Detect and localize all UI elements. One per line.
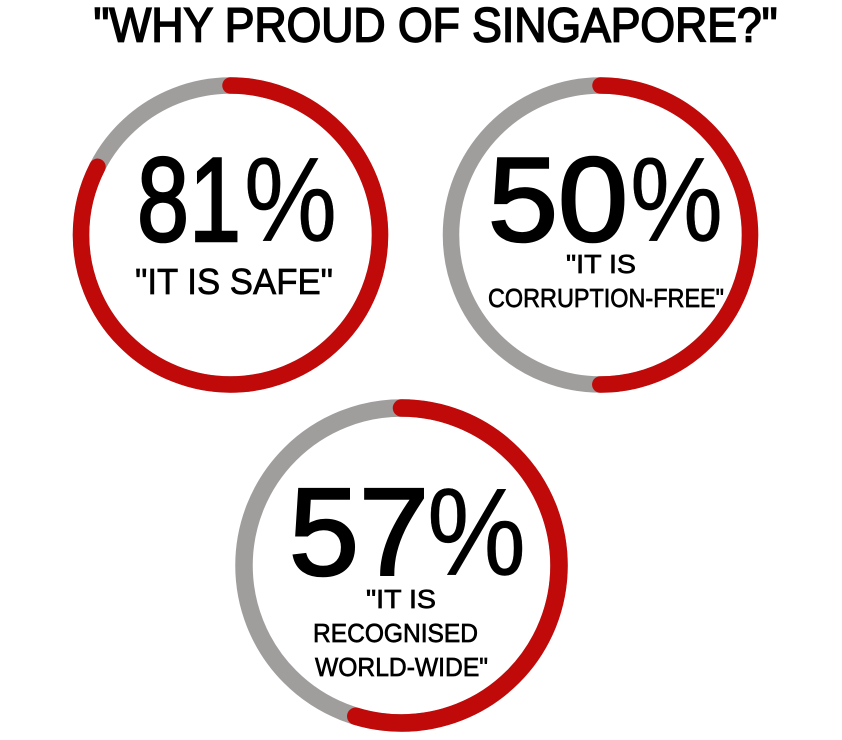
value: 57%: 57 [289,464,429,602]
value: 81%: % [244,133,337,267]
panel: 50% it is corruption-free [451,86,750,384]
panel: 81% it is safe [81,86,380,384]
title: "WHY PROUD OF SINGAPORE?" [94,0,778,52]
value: 57% [289,464,526,602]
label: it is safe: "IT IS SAFE" [135,261,333,302]
label: it is recognised world-wide: "IT IS [366,584,436,614]
value: 50%: % [630,133,723,267]
value: 50%: 50 [488,133,628,267]
label: it is recognised world-wide [313,584,488,682]
ring: 81% [81,86,380,384]
ring: 50% [451,86,750,384]
value: 81% [137,133,337,267]
value: 50% [488,133,723,267]
label: it is recognised world-wide: RECOGNISED [313,618,478,648]
label: it is corruption-free: CORRUPTION-FREE" [488,283,724,313]
label: it is corruption-free: "IT IS [566,249,636,279]
label: it is recognised world-wide: WORLD-WIDE" [315,652,488,682]
value: 57%: % [427,464,526,602]
value: 81%: 81 [137,133,241,267]
ring: 57% [244,408,559,723]
panel: 57% it is recognised world-wide [244,408,559,723]
label: it is corruption-free [488,249,724,313]
